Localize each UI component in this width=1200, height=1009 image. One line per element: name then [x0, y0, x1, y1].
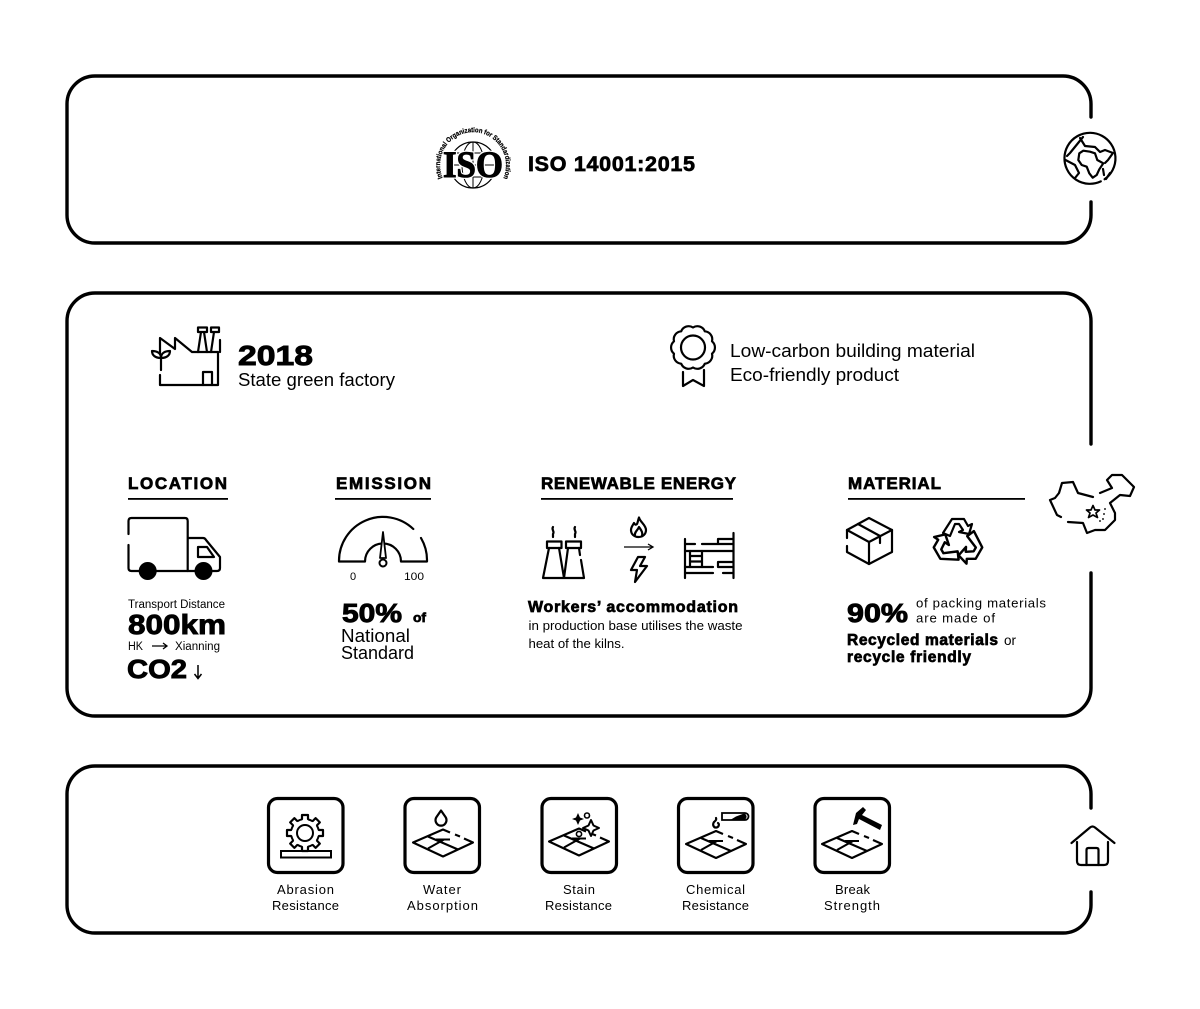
icon: gauge: 0: [350, 571, 356, 583]
material text: 90%: [847, 598, 908, 628]
break strength: [815, 798, 890, 913]
emission stat: [341, 598, 427, 663]
icon: house: [1072, 826, 1114, 865]
emission stat: 50%: [342, 598, 402, 628]
column: location: [127, 474, 228, 684]
certification text: Low-carbon building material: [730, 340, 975, 361]
column: material: [847, 474, 1046, 666]
chemical resistance: Chemical: [686, 882, 745, 897]
column: location: LOCATION: [128, 474, 227, 493]
icon: green factory: [152, 328, 220, 385]
transport data: Transport Distance: [128, 599, 225, 611]
icon: test tube: [713, 813, 748, 828]
material text: of packing materials: [916, 596, 1046, 610]
break strength: Break: [835, 882, 870, 897]
icon: ISO logo: International Organization for Standardization: [436, 127, 511, 180]
icon: heat to power: [624, 518, 653, 582]
column: emission: [335, 474, 431, 663]
stain resistance: Stain: [563, 882, 595, 897]
year: 2018: [238, 340, 313, 371]
certification text: [730, 340, 975, 385]
column: renewable energy: RENEWABLE ENERGY: [541, 474, 737, 493]
chemical resistance: [678, 798, 753, 913]
material text: [847, 596, 1046, 666]
transport data: Xianning: [175, 641, 220, 653]
renewable energy text: heat of the kilns.: [528, 636, 624, 651]
renewable energy text: in production base utilises the waste: [528, 618, 742, 633]
panel: product performance: [67, 766, 1091, 933]
break strength: Strength: [824, 898, 880, 913]
abrasion resistance: [268, 798, 343, 913]
icon: ISO logo: ISO: [443, 145, 503, 186]
column: material: MATERIAL: [848, 474, 941, 493]
icon: bunk bed: [685, 533, 734, 578]
water absorption: Water: [423, 882, 462, 897]
icon: gear: [287, 815, 323, 851]
icon: globe: [1064, 133, 1115, 184]
icon: gauge: 100: [404, 571, 424, 583]
icon: box: [847, 518, 892, 564]
panel: ISO certification: [65, 74, 1117, 245]
abrasion resistance: Abrasion: [277, 882, 334, 897]
factory caption: State green factory: [238, 370, 395, 390]
column: emission: EMISSION: [336, 474, 431, 493]
icon: recycle: [929, 519, 987, 567]
icon: kiln chimneys: [543, 527, 584, 578]
material text: or: [1004, 632, 1016, 648]
transport data: CO2: [127, 654, 187, 684]
icon: sparkles: [572, 813, 599, 837]
chemical resistance: Resistance: [682, 898, 749, 913]
renewable energy text: [528, 599, 742, 651]
transport data: 800km: [128, 609, 226, 640]
icon: gauge: [339, 517, 427, 583]
transport data: HK: [128, 641, 143, 653]
stain resistance: [542, 798, 616, 913]
emission stat: Standard: [341, 642, 414, 663]
material text: Recycled materials: [847, 632, 998, 649]
ISO standard label: ISO 14001:2015: [528, 152, 695, 176]
column: renewable energy: [528, 474, 742, 651]
renewable energy text: Workers’ accommodation: [528, 599, 738, 616]
icon: hammer: [853, 807, 882, 830]
stain resistance: Resistance: [545, 898, 612, 913]
certification text: Eco-friendly product: [730, 364, 899, 385]
emission stat: of: [413, 610, 427, 625]
transport data: [127, 599, 226, 684]
icon: ISO logo: ISO: [443, 145, 503, 186]
emission stat: National: [341, 625, 410, 646]
icon: China map: [1050, 475, 1134, 533]
abrasion resistance: Resistance: [272, 898, 339, 913]
material text: recycle friendly: [847, 649, 971, 666]
icon: water drop: [436, 810, 447, 826]
water absorption: Absorption: [407, 898, 478, 913]
icon: award badge: [671, 326, 715, 386]
material text: are made of: [916, 610, 995, 626]
panel: factory credentials: [67, 293, 1134, 933]
icon: truck: [128, 518, 220, 580]
water absorption: [405, 798, 480, 913]
